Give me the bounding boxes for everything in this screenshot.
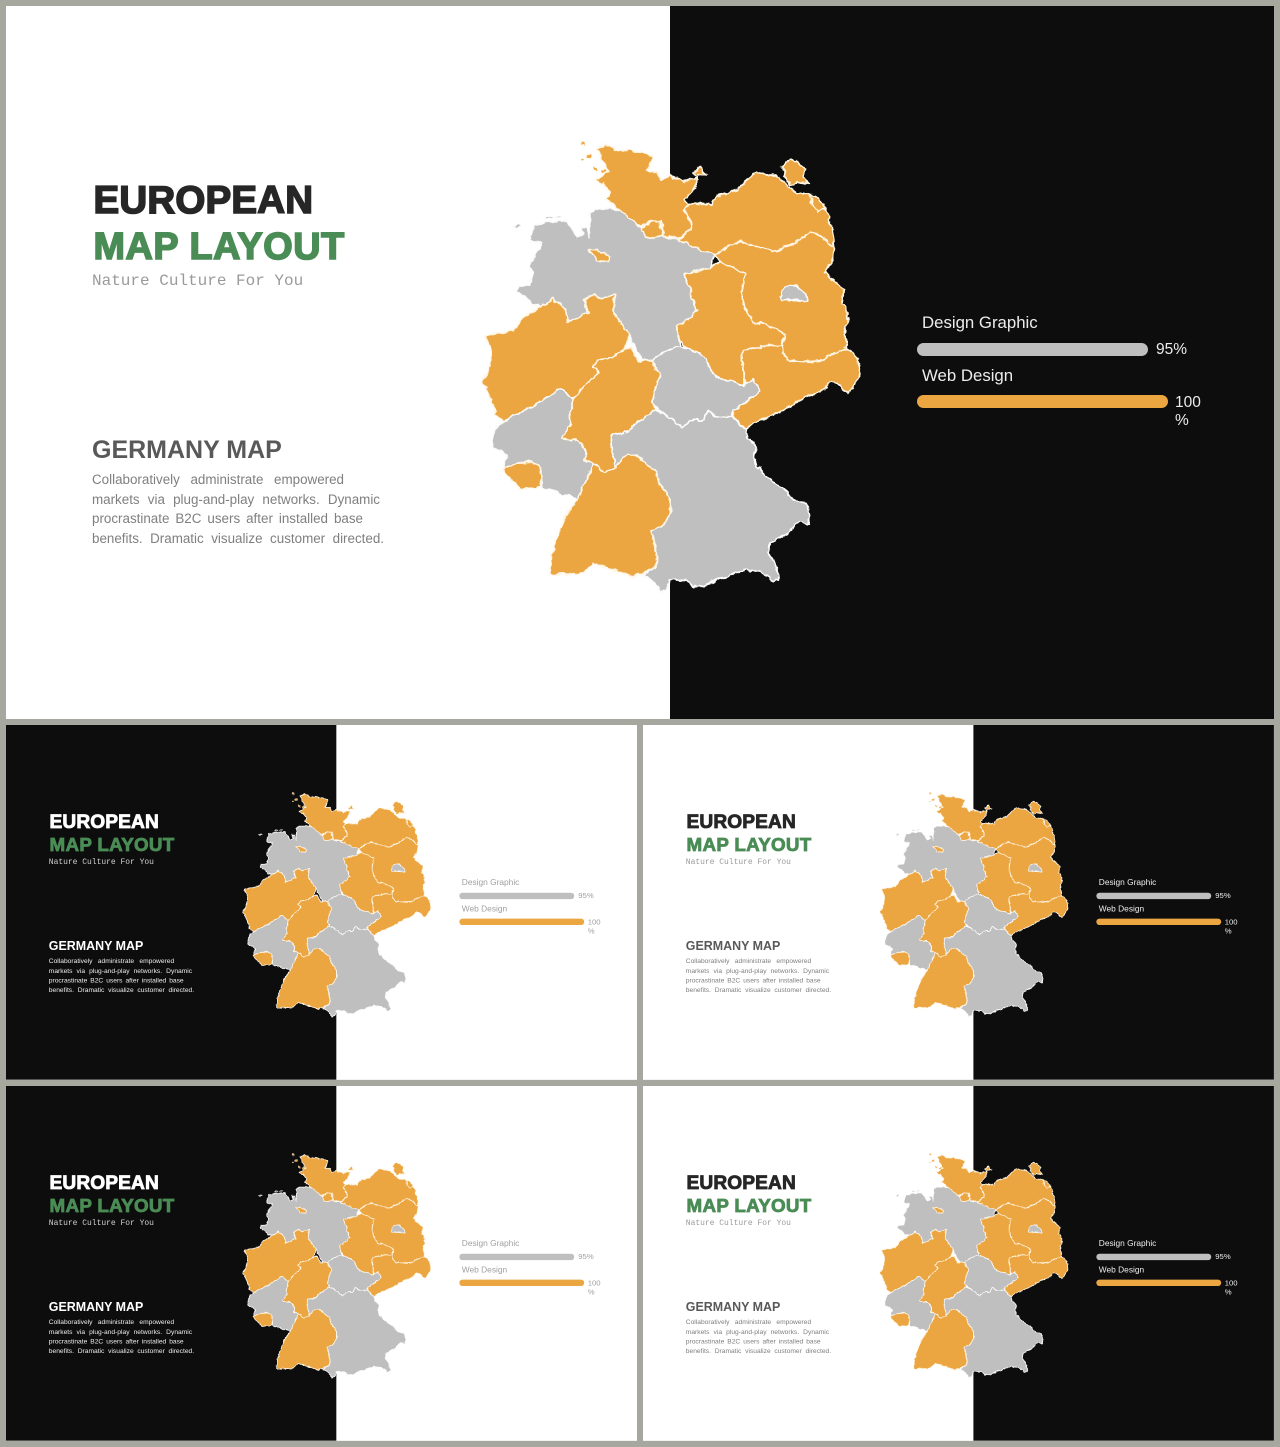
value: 100% — [588, 918, 601, 935]
value: 100%: % — [1225, 927, 1232, 935]
bar: Web Design 100% — [1096, 919, 1221, 925]
region: Hamburg — [642, 220, 663, 238]
value: 100% — [588, 1279, 601, 1296]
bar: Design Graphic 95% — [1096, 893, 1211, 899]
title: Map Layout: MAP LAYOUT — [687, 1195, 812, 1216]
title: Map Layout: MAP LAYOUT — [50, 834, 175, 855]
region: Saxony — [733, 345, 860, 428]
text block: description: procrastinate B2C users after installed base — [686, 976, 821, 984]
text block: description — [49, 1318, 194, 1355]
legend: Web Design label: Web Design — [1099, 904, 1144, 914]
text block: description: Collaboratively administrate empowered — [686, 1318, 811, 1325]
text block: description: procrastinate B2C users after installed base — [686, 1337, 821, 1345]
region: Lower Saxony — [517, 209, 715, 360]
legend: Web Design label: Web Design — [462, 1265, 507, 1275]
subtitle: Nature Culture For You — [49, 1218, 154, 1227]
region: Bremen — [588, 250, 610, 262]
text block: description — [686, 957, 831, 994]
bar: Design Graphic 95% — [459, 893, 574, 899]
subtitle: Nature Culture For You — [92, 272, 303, 290]
subtitle: Nature Culture For You — [49, 857, 154, 866]
region: Hesse — [562, 347, 660, 473]
panel: small slide, dark left — [6, 725, 637, 1080]
value: 100%: 100 — [588, 918, 601, 927]
legend: Design Graphic label: Design Graphic — [1099, 1239, 1156, 1248]
text block: description: procrastinate B2C users after installed base — [49, 976, 184, 984]
title: European: EUROPEAN — [50, 811, 159, 832]
text block: description: markets via plug-and-play networks. Dynamic — [49, 967, 192, 974]
title: European: EUROPEAN — [50, 1172, 159, 1193]
text block: description — [49, 957, 194, 994]
value: 100% — [1225, 918, 1238, 935]
value: 95%: 95% — [578, 1253, 594, 1261]
map: Germany by state — [242, 792, 432, 1018]
bar: Design Graphic 95% — [917, 343, 1148, 356]
value: 100%: 100 — [1175, 394, 1201, 411]
region: Berlin — [780, 285, 807, 302]
value: 95%: 95% — [1215, 892, 1231, 900]
value: 100%: 100 — [1225, 918, 1238, 927]
region: Schleswig-Holstein — [595, 145, 697, 238]
region: Mecklenburg-Vorpommern — [678, 172, 835, 255]
value: 100%: 100 — [588, 1279, 601, 1288]
legend: Design Graphic label: Design Graphic — [462, 1239, 519, 1248]
legend: Design Graphic label: Design Graphic — [1099, 878, 1156, 887]
text block: description: Collaboratively administrate empowered — [686, 957, 811, 964]
subtitle: Nature Culture For You — [686, 1218, 791, 1227]
subtitle: Nature Culture For You — [686, 857, 791, 866]
text block: description: Collaboratively administrate empowered — [49, 957, 174, 964]
legend: Web Design label: Web Design — [462, 904, 507, 914]
region: Brandenburg — [715, 232, 848, 362]
region: Fehmarn — [693, 167, 707, 175]
text block: description: Collaboratively administrate empowered — [49, 1318, 174, 1325]
heading: Germany Map: GERMANY MAP — [92, 436, 282, 464]
heading: Germany Map: GERMANY MAP — [686, 1300, 780, 1314]
region: Saarland — [502, 462, 542, 488]
legend: Web Design label: Web Design — [922, 366, 1013, 385]
value: 100%: % — [1225, 1288, 1232, 1296]
text block: description: benefits. Dramatic visualize customer directed. — [686, 986, 831, 994]
region: Ruegen — [782, 158, 808, 185]
legend: Design Graphic label: Design Graphic — [922, 313, 1038, 332]
title: European: EUROPEAN — [94, 178, 313, 222]
value: 100%: 100 — [1225, 1279, 1238, 1288]
panel: small slide, light left, lower row — [643, 1086, 1274, 1441]
region: Bavaria — [612, 410, 810, 592]
text block: description — [686, 1318, 831, 1355]
bar: Web Design 100% — [1096, 1280, 1221, 1286]
value: 100%: % — [1175, 412, 1189, 429]
region: Thuringia — [642, 347, 760, 428]
value: 95%: 95% — [578, 892, 594, 900]
bar: Design Graphic 95% — [459, 1254, 574, 1260]
region: Saxony-Anhalt — [677, 262, 785, 385]
text block: description: markets via plug-and-play networks. Dynamic — [686, 967, 829, 974]
map: Germany by state — [880, 792, 1068, 1016]
text block: description: benefits. Dramatic visualize customer directed. — [686, 1347, 831, 1355]
text block: description: markets via plug-and-play networks. Dynamic — [49, 1328, 192, 1335]
value: 100% — [1175, 394, 1201, 429]
title: Map Layout: MAP LAYOUT — [687, 834, 812, 855]
map: Germany by state — [242, 1153, 432, 1378]
bar: Web Design 100% — [459, 1280, 584, 1286]
bar: Web Design 100% — [917, 395, 1168, 408]
text block: description: benefits. Dramatic visualize customer directed. — [92, 531, 384, 546]
panel: small slide, dark left, lower row — [6, 1086, 637, 1441]
title: Map Layout: MAP LAYOUT — [50, 1195, 175, 1216]
title: Map Layout: MAP LAYOUT — [94, 226, 345, 268]
legend: Design Graphic label: Design Graphic — [462, 878, 519, 887]
legend: Web Design label: Web Design — [1099, 1265, 1144, 1275]
text block: description: procrastinate B2C users after installed base — [92, 511, 363, 526]
title: European: EUROPEAN — [687, 811, 796, 832]
map: Germany by state — [880, 1153, 1068, 1378]
value: 95%: 95% — [1156, 341, 1187, 358]
heading: Germany Map: GERMANY MAP — [49, 1300, 143, 1314]
map: Germany by state — [481, 141, 861, 592]
value: 95%: 95% — [1215, 1253, 1231, 1261]
value: 100%: % — [588, 1288, 595, 1296]
value: 100%: % — [588, 927, 595, 935]
value: 100% — [1225, 1279, 1238, 1296]
text block: description: procrastinate B2C users after installed base — [49, 1337, 184, 1345]
panel: large main slide — [6, 6, 1274, 719]
title: European: EUROPEAN — [687, 1172, 796, 1193]
text block: description: benefits. Dramatic visualize customer directed. — [49, 1347, 194, 1355]
region: Usedom — [810, 195, 827, 212]
text block: description — [92, 472, 384, 546]
bar: Web Design 100% — [459, 919, 584, 925]
panel: small slide, light left — [643, 725, 1274, 1080]
text block: description: markets via plug-and-play networks. Dynamic — [686, 1328, 829, 1335]
bar: Design Graphic 95% — [1096, 1254, 1211, 1260]
islands: North Sea — [513, 142, 607, 228]
region: Rhineland-Palatinate — [492, 388, 593, 498]
heading: Germany Map: GERMANY MAP — [49, 939, 143, 953]
text block: description: markets via plug-and-play networks. Dynamic — [92, 492, 380, 507]
text block: description: Collaboratively administrate empowered — [92, 472, 344, 487]
region: North Rhine-Westphalia — [482, 293, 628, 422]
heading: Germany Map: GERMANY MAP — [686, 939, 780, 953]
region: Baden-Wuerttemberg — [550, 455, 670, 577]
text block: description: benefits. Dramatic visualize customer directed. — [49, 986, 194, 994]
